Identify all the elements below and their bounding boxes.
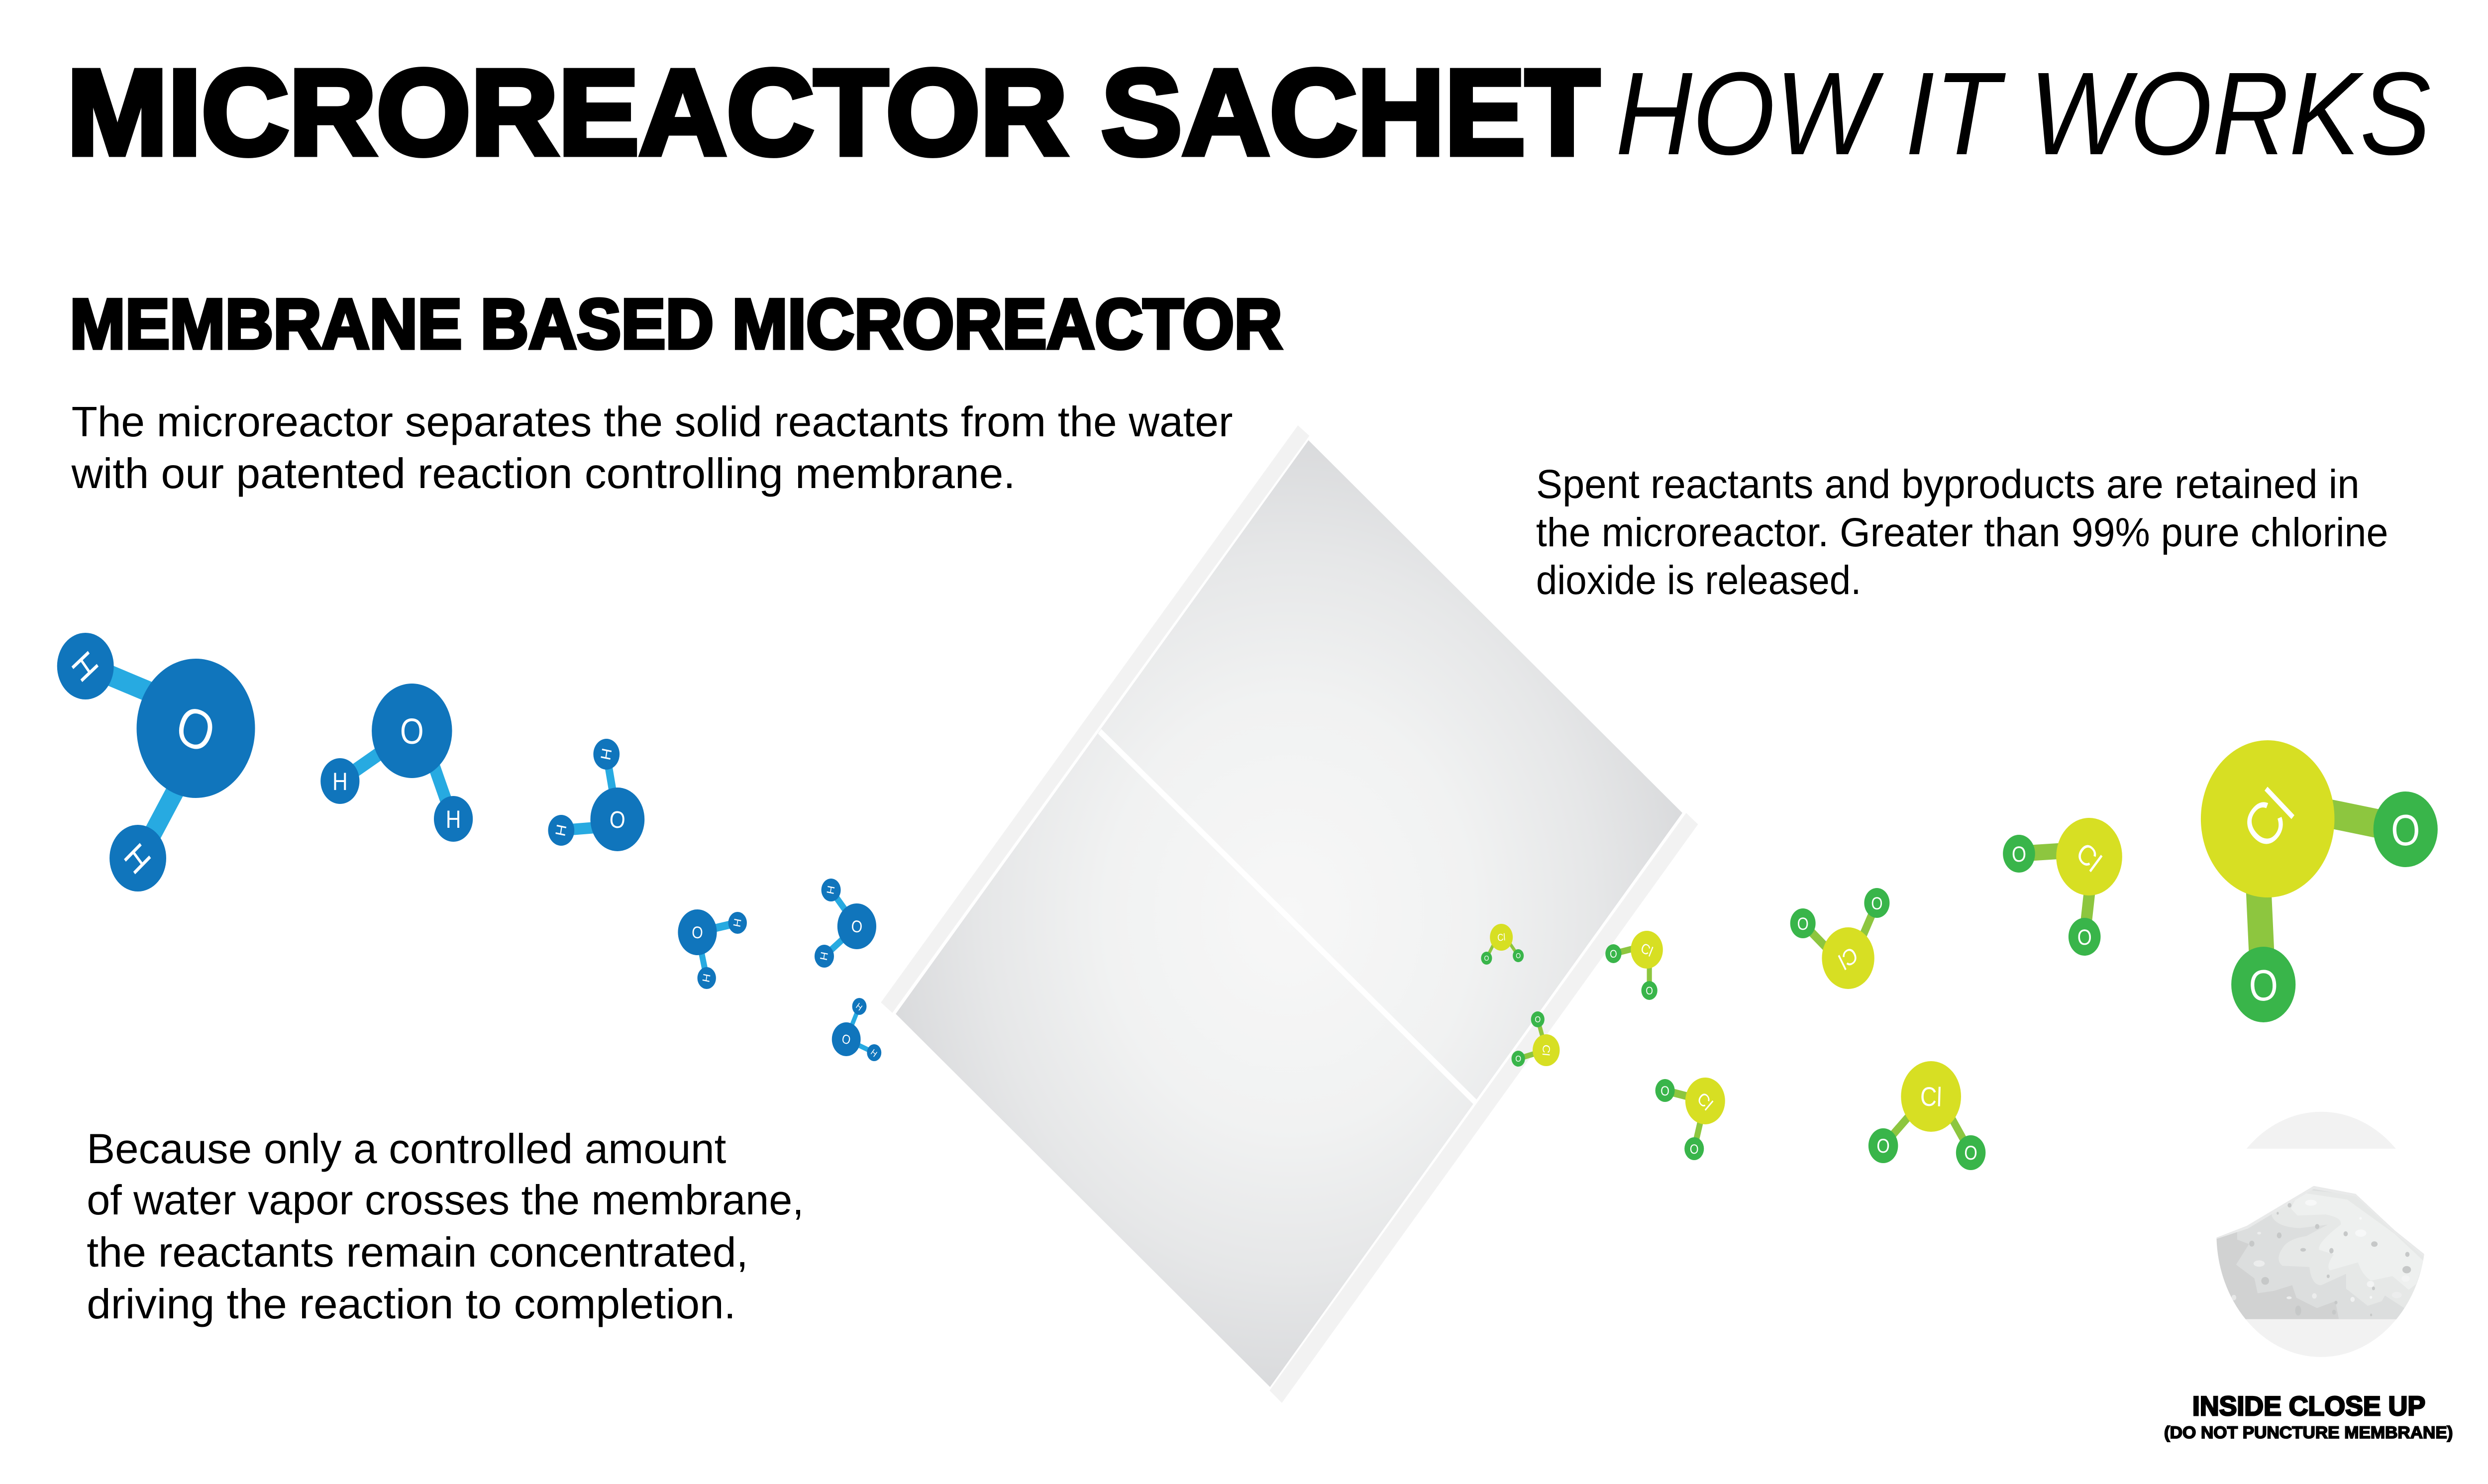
water molecule 5: H bbox=[825, 885, 837, 895]
water molecule 6 bbox=[832, 998, 881, 1061]
chlorine dioxide molecule 5: O bbox=[1660, 1084, 1669, 1098]
close up: lower membrane segment bbox=[2246, 1319, 2396, 1357]
chlorine dioxide molecule 3: O bbox=[1871, 894, 1882, 913]
water molecule 6: H bbox=[869, 1047, 879, 1059]
text block: spent reactants: dioxide is released. bbox=[1536, 558, 1861, 603]
text block: membrane separation: The microreactor separates the solid reactants from the water bbox=[72, 398, 1233, 445]
close up: solid reactants bbox=[2216, 1186, 2424, 1319]
chlorine dioxide molecule 7: O bbox=[1535, 1014, 1541, 1024]
text block: controlled water vapor: of water vapor crosses the membrane, bbox=[87, 1176, 804, 1223]
water molecule 1: H bbox=[65, 644, 104, 690]
water molecule 3: H bbox=[598, 747, 615, 762]
sachet body bbox=[896, 440, 1682, 1387]
water molecule 5 bbox=[815, 879, 876, 968]
chlorine dioxide molecule 5: O bbox=[1690, 1142, 1699, 1157]
text block: controlled water vapor bbox=[87, 1125, 804, 1327]
water molecule 4: H bbox=[700, 973, 713, 984]
text block: controlled water vapor: Because only a controlled amount bbox=[87, 1125, 726, 1172]
water molecule 2: H bbox=[332, 768, 348, 795]
water molecule 2 bbox=[320, 684, 473, 842]
chlorine dioxide molecule 4: O bbox=[1876, 1134, 1890, 1157]
membrane divider bbox=[1100, 731, 1475, 1102]
water molecule 6: O bbox=[840, 1031, 852, 1048]
text block: spent reactants: Spent reactants and byproducts are retained in bbox=[1536, 462, 2360, 507]
water molecule 1: O bbox=[169, 693, 222, 766]
chlorine dioxide molecule 2: O bbox=[2077, 924, 2092, 950]
chlorine dioxide molecule 5: Cl bbox=[1694, 1088, 1716, 1114]
water molecule 5: H bbox=[818, 951, 830, 962]
chlorine dioxide molecule 2: O bbox=[2011, 841, 2027, 867]
water molecule 6: H bbox=[854, 1001, 864, 1013]
chlorine dioxide molecule 3: O bbox=[1797, 914, 1809, 934]
chlorine dioxide molecule 2 bbox=[2003, 818, 2122, 956]
chlorine dioxide molecule 8: O bbox=[1484, 954, 1489, 962]
text block: spent reactants: the microreactor. Greater than 99% pure chlorine bbox=[1536, 510, 2388, 555]
sachet sealed edge: upper left bbox=[881, 425, 1309, 1013]
text block: membrane separation: with our patented reaction controlling membrane. bbox=[71, 450, 1016, 497]
chlorine dioxide molecule 8: O bbox=[1516, 951, 1521, 960]
chlorine dioxide molecule 2: Cl bbox=[2071, 836, 2106, 879]
chlorine dioxide molecule 7: Cl bbox=[1540, 1044, 1553, 1056]
chlorine dioxide molecule 8: Cl bbox=[1497, 931, 1506, 943]
chlorine dioxide molecule 7 bbox=[1512, 1011, 1559, 1067]
chlorine dioxide molecule 5 bbox=[1656, 1078, 1725, 1160]
water molecule 2: O bbox=[400, 712, 424, 752]
water molecule 4: H bbox=[731, 917, 743, 928]
text block: membrane separation bbox=[71, 398, 1233, 497]
sachet diagram bbox=[881, 425, 1698, 1403]
chlorine dioxide molecule 3 bbox=[1790, 888, 1889, 989]
chlorine dioxide molecule 6: O bbox=[1610, 949, 1617, 960]
water molecule 4: O bbox=[691, 922, 704, 942]
chlorine dioxide molecule 6: O bbox=[1646, 986, 1653, 997]
text block: spent reactants bbox=[1536, 462, 2388, 603]
chlorine dioxide molecule 3: Cl bbox=[1835, 941, 1862, 974]
caption: do not puncture membrane: (DO NOT PUNCTURE MEMBRANE) bbox=[2164, 1423, 2453, 1442]
water molecule 5: O bbox=[850, 916, 863, 937]
chlorine dioxide molecule 4: Cl bbox=[1920, 1082, 1942, 1112]
chlorine dioxide molecule 4 bbox=[1868, 1061, 1985, 1170]
chlorine dioxide molecule 1: O bbox=[2248, 961, 2279, 1011]
caption: inside close up: INSIDE CLOSE UP bbox=[2192, 1390, 2425, 1421]
chlorine dioxide molecule 6 bbox=[1605, 931, 1663, 1000]
chlorine dioxide molecule 6: Cl bbox=[1639, 940, 1655, 960]
text block: controlled water vapor: the reactants remain concentrated, bbox=[87, 1228, 748, 1276]
sachet sealed edge: lower right bbox=[1269, 813, 1698, 1403]
water molecule 2: H bbox=[446, 805, 461, 833]
water molecule 1 bbox=[57, 633, 255, 891]
chlorine dioxide molecule 4: O bbox=[1964, 1141, 1978, 1164]
chlorine dioxide molecule 7: O bbox=[1515, 1054, 1521, 1064]
chlorine dioxide molecule 1 bbox=[2201, 740, 2438, 1022]
water molecule 4 bbox=[678, 909, 747, 989]
water molecule 3: H bbox=[552, 823, 569, 838]
water molecule 3: O bbox=[609, 806, 626, 834]
water molecule 1: H bbox=[117, 836, 157, 882]
title: how it works: HOW IT WORKS bbox=[1616, 48, 2431, 180]
close up: upper membrane segment bbox=[2247, 1112, 2396, 1149]
heading: membrane based microreactor: MEMBRANE BASED MICROREACTOR bbox=[70, 285, 1282, 363]
chlorine dioxide molecule 1: Cl bbox=[2232, 777, 2305, 862]
text block: controlled water vapor: driving the reaction to completion. bbox=[87, 1280, 736, 1327]
chlorine dioxide molecule 8 bbox=[1481, 924, 1524, 965]
chlorine dioxide molecule 1: O bbox=[2390, 805, 2421, 856]
inside close up illustration bbox=[2216, 1112, 2424, 1357]
title: microreactor sachet: MICROREACTOR SACHET bbox=[67, 44, 1599, 180]
water molecule 3 bbox=[548, 739, 644, 851]
